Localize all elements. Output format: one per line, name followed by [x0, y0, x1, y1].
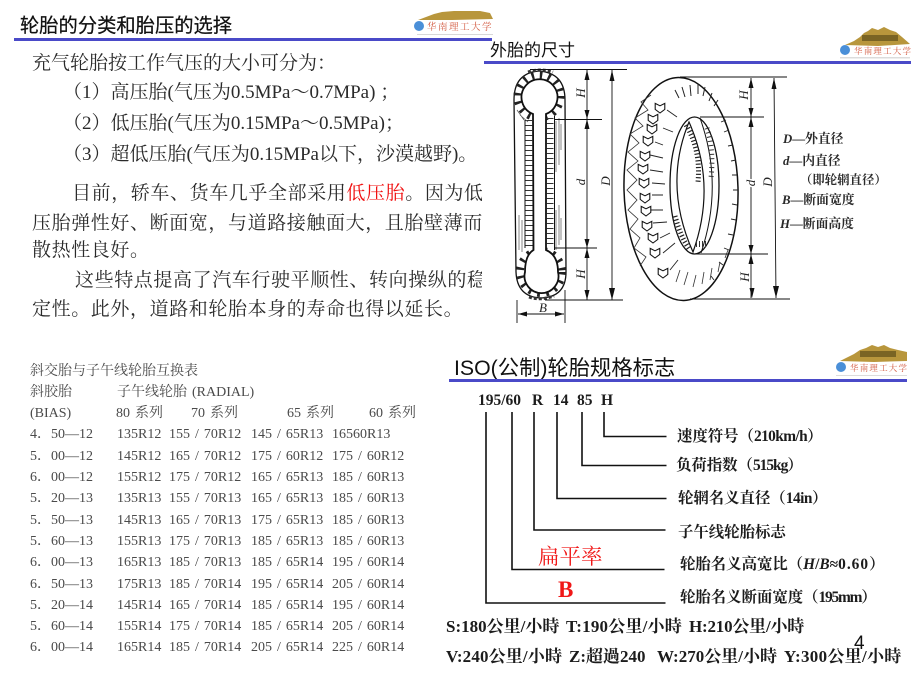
table row 5: 145R13: [117, 513, 161, 528]
table row 1: 155 / 70R12: [169, 427, 241, 442]
perspective tyre dimension letters: H: [737, 272, 752, 283]
table row 2: 175 / 60R12: [332, 449, 404, 464]
table row 4: 155 / 70R13: [169, 491, 241, 506]
label: load index: 负荷指数（515kg）: [676, 457, 803, 474]
label: speed symbol: 速度符号（210km/h）: [677, 428, 822, 445]
speed rating: T: T:190公里/小時: [566, 617, 682, 636]
speed rating: H: H:210公里/小時: [689, 617, 804, 636]
table row 10: 5．60—14: [30, 619, 93, 634]
table header: types: [30, 384, 254, 400]
table row 11: 225 / 60R14: [332, 640, 404, 655]
table row 6: 185 / 60R13: [332, 534, 404, 549]
table row 5: 175 / 65R13: [251, 513, 323, 528]
table row 8: 195 / 65R14: [251, 577, 323, 592]
code: radial: R: [532, 392, 543, 409]
table row 8: 6．50—13: [30, 577, 93, 592]
logo: top left university badge: [414, 11, 493, 35]
speed rating: Z: Z:超過240: [569, 647, 646, 666]
speed rating: W: W:270公里/小時: [657, 647, 777, 666]
code: speed symbol: H: [601, 392, 613, 409]
logo: lower right university badge: 华南理工大学: [850, 363, 908, 373]
table row 11: 165R14: [117, 640, 161, 655]
table row 2: 145R12: [117, 449, 161, 464]
cross section tyre: [514, 70, 566, 299]
table row 3: [30, 470, 404, 485]
header rule: top right: [484, 61, 911, 64]
diagram: tyre cross section and tyre dimensions: [513, 68, 790, 323]
table row 7: 165R13: [117, 555, 161, 570]
perspective tyre dimension letters: d: [743, 179, 758, 186]
table row 7: [30, 555, 404, 570]
table row 11: 185 / 70R14: [169, 640, 241, 655]
callout: aspect ratio in red: 扁平率: [538, 545, 603, 569]
table row 8: 185 / 70R14: [169, 577, 241, 592]
table title: 斜交胎与子午线轮胎互换表: [30, 364, 198, 379]
callout: B in red: B: [558, 577, 573, 602]
table row 11: 6．00—14: [30, 640, 93, 655]
table row 9: 165 / 70R14: [169, 598, 241, 613]
tyre tread blocks: [638, 103, 668, 278]
table row 5: 185 / 60R13: [332, 513, 404, 528]
table row 8: 205 / 60R14: [332, 577, 404, 592]
table row 2: 165 / 70R12: [169, 449, 241, 464]
table row 3: 6．00—12: [30, 470, 93, 485]
table row 1: 16560R13: [332, 427, 390, 442]
table header: series: 70 系列: [191, 406, 238, 421]
paragraph: low pressure tyre usage: 目前，轿车、货车几乎全部采用低压胎。因为低: [72, 183, 482, 204]
table row 2: 5．00—12: [30, 449, 93, 464]
paragraph: benefits: 这些特点提高了汽车行驶平顺性、转向操纵的稳: [75, 270, 482, 291]
list item: ultra low pressure tyre: （3）超低压胎(气压为0.15MPa以下，沙漠越野)。: [63, 144, 477, 165]
table row 7: 195 / 60R14: [332, 555, 404, 570]
table header: series: 65 系列: [287, 406, 334, 421]
table row 3: 185 / 60R13: [332, 470, 404, 485]
cross section dimension letters: D: [598, 176, 613, 187]
explanation labels: [676, 428, 884, 606]
paragraph: benefits: 定性。此外，道路和轮胎本身的寿命也得以延长。: [32, 299, 463, 320]
table row 5: 165 / 70R13: [169, 513, 241, 528]
legend: section width: B—断面宽度: [782, 193, 855, 207]
speed rating: Y: Y:300公里/小時: [784, 647, 902, 666]
table row 7: 6．00—13: [30, 555, 93, 570]
table row 11: [30, 640, 404, 655]
label: nominal aspect ratio: 轮胎名义高宽比（H/B≈0.60）: [680, 556, 884, 573]
table row 9: 5．20—14: [30, 598, 93, 613]
table row 4: [30, 491, 404, 506]
list item: low pressure tyre: （2）低压胎(气压为0.15MPa～0.5MPa)；: [63, 113, 404, 134]
cross section dimension lines: [517, 70, 627, 323]
label: rim nominal diameter: 轮辋名义直径（14in）: [678, 490, 827, 507]
table header: series: 60 系列: [369, 406, 416, 421]
header rule: top left: [14, 38, 492, 41]
table row 6: 5．60—13: [30, 534, 93, 549]
perspective tyre: [621, 76, 741, 302]
heading: ISO tyre specification marking: ISO(公制)轮胎规格标志: [454, 356, 675, 380]
intro sentence: 充气轮胎按工作气压的大小可分为：: [32, 53, 336, 74]
table row 7: 185 / 70R13: [169, 555, 241, 570]
code: rim diameter: 14: [553, 392, 568, 409]
table row 7: 185 / 65R14: [251, 555, 323, 570]
logo: lower right university badge: [836, 345, 908, 376]
table row 1: [30, 427, 390, 442]
speed rating: V: V:240公里/小時: [446, 647, 562, 666]
spec code characters: [478, 392, 613, 409]
speed ratings text: [446, 617, 902, 666]
speed rating: S: S:180公里/小時: [446, 617, 559, 636]
code: width and aspect ratio: 195/60: [478, 392, 521, 409]
heading: outer tyre dimensions: 外胎的尺寸: [490, 41, 575, 60]
table: bias to radial tyre conversion: [30, 362, 416, 655]
logo: top right university badge: 华南理工大学: [854, 46, 912, 56]
table header: types: 斜胶胎: [30, 385, 72, 400]
legend: section height: H—断面高度: [780, 217, 854, 231]
table row 3: 175 / 70R12: [169, 470, 241, 485]
table row 10: 175 / 70R14: [169, 619, 241, 634]
cross section dimension letters: d: [573, 178, 588, 185]
table header: series: 80 系列: [116, 406, 163, 421]
paragraph: low pressure tyre usage: 压胎弹性好、断面宽，与道路接触面大，且胎壁薄而: [32, 213, 482, 234]
legend: rim diameter note: （即轮辋直径）: [800, 173, 887, 187]
table row 2: [30, 449, 404, 464]
legend: dimension symbols: [780, 132, 887, 231]
table header: series: (BIAS): [30, 406, 71, 421]
page number: 4: [854, 633, 865, 654]
table row 1: 4．50—12: [30, 427, 93, 442]
cross section dimension letters: [539, 88, 613, 315]
cross section dimension letters: B: [539, 300, 547, 315]
panel: tyre classification text: [20, 15, 482, 320]
table header: types: 子午线轮胎 (RADIAL): [117, 385, 254, 400]
table row 8: [30, 577, 404, 592]
perspective tyre dimension letters: [736, 90, 775, 283]
table row 10: [30, 619, 404, 634]
legend: outer diameter: D—外直径: [783, 132, 843, 146]
code: load index: 85: [577, 392, 592, 409]
table row 4: 185 / 60R13: [332, 491, 404, 506]
table row 6: 185 / 65R13: [251, 534, 323, 549]
perspective tyre dimension lines: [680, 77, 790, 299]
table row 10: 155R14: [117, 619, 161, 634]
legend: inner diameter: d—内直径: [783, 154, 841, 168]
table row 1: 135R12: [117, 427, 161, 442]
label: radial tyre marking: 子午线轮胎标志: [678, 524, 786, 541]
table row 4: 135R13: [117, 491, 161, 506]
logo: top right university badge: [840, 27, 912, 58]
table row 10: 205 / 60R14: [332, 619, 404, 634]
cross section dimension letters: H: [573, 88, 588, 99]
paragraph: benefits: [32, 270, 482, 320]
table row 6: [30, 534, 404, 549]
table row 1: 145 / 65R13: [251, 427, 323, 442]
table row 9: 195 / 60R14: [332, 598, 404, 613]
cross section dimension letters: H: [573, 269, 588, 280]
table row 8: 175R13: [117, 577, 161, 592]
heading: tyre classification and pressure: 轮胎的分类和胎压的选择: [20, 16, 232, 37]
table row 4: 5．20—13: [30, 491, 93, 506]
table row 5: [30, 513, 404, 528]
list item: high pressure tyre: （1）高压胎(气压为0.5MPa～0.7MPa) ；: [63, 82, 399, 103]
label: nominal section width: 轮胎名义断面宽度（195mm）: [680, 589, 877, 606]
table row 5: 5．50—13: [30, 513, 93, 528]
table row 3: 165 / 65R13: [251, 470, 323, 485]
paragraph: low pressure tyre usage: [32, 182, 482, 261]
table row 3: 155R12: [117, 470, 161, 485]
paragraph: low pressure tyre usage: 散热性良好。: [32, 240, 150, 261]
perspective tyre dimension letters: H: [736, 90, 751, 101]
table header: series: [30, 404, 416, 421]
table row 6: 175 / 70R13: [169, 534, 241, 549]
table row 9: [30, 598, 404, 613]
leader lines from code to explanations: [485, 412, 666, 604]
table row 9: 185 / 65R14: [251, 598, 323, 613]
table row 2: 175 / 60R12: [251, 449, 323, 464]
table row 6: 155R13: [117, 534, 161, 549]
perspective tyre dimension letters: D: [760, 177, 775, 188]
table row 10: 185 / 65R14: [251, 619, 323, 634]
table row 11: 205 / 65R14: [251, 640, 323, 655]
logo: top left university badge: 华南理工大学: [427, 21, 493, 33]
header rule: lower right: [449, 379, 907, 382]
table row 4: 165 / 65R13: [251, 491, 323, 506]
table row 9: 145R14: [117, 598, 161, 613]
